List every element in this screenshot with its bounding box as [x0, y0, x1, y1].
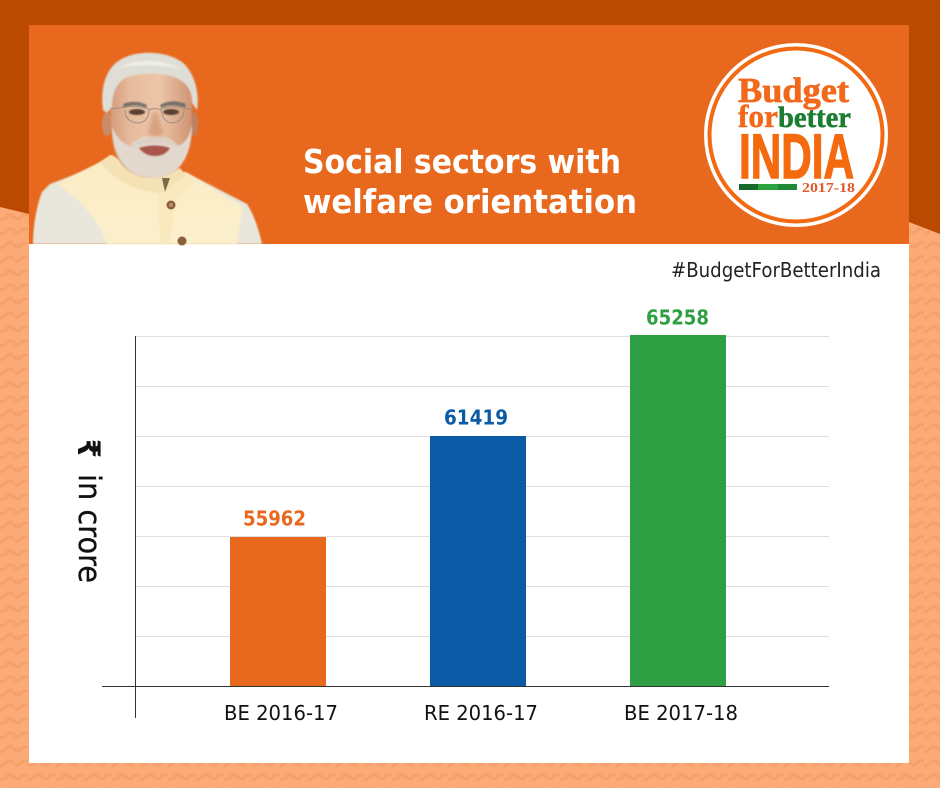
title [303, 142, 637, 221]
dark orange top band [0, 0, 940, 234]
title: welfare orientation [303, 182, 637, 221]
logo badge: Budget for better India: 2017-18 [802, 180, 855, 195]
value labels: 61419 [444, 406, 508, 430]
ears [102, 112, 112, 136]
logo badge: Budget for better India: for [738, 98, 778, 134]
value labels: 55962 [243, 506, 306, 530]
y-axis label: in crore [71, 474, 107, 583]
title: Social sectors with [303, 142, 621, 181]
category labels: RE 2016-17 [424, 701, 538, 725]
logo badge: Budget for better India [704, 43, 888, 227]
value labels: 65258 [646, 306, 709, 330]
logo badge: Budget for better India: better [778, 101, 851, 134]
logo badge: Budget for better India: INDIA [739, 122, 854, 192]
bar: RE 2016-17 [430, 436, 526, 686]
bar chart [102, 306, 829, 725]
y-axis label [70, 439, 107, 583]
panel: white chart area [29, 244, 909, 763]
value labels [243, 306, 709, 530]
bar: BE 2016-17 [230, 537, 326, 686]
logo badge: Budget for better India: Budget [738, 71, 849, 110]
category labels [224, 701, 738, 725]
portrait illustration [33, 53, 262, 245]
bar: BE 2017-18 [630, 335, 726, 686]
panel: orange header [29, 25, 909, 244]
hashtag: #BudgetForBetterIndia [671, 258, 881, 282]
y-axis label: ₹ [70, 439, 106, 458]
category labels: BE 2016-17 [224, 701, 338, 725]
category labels: BE 2017-18 [624, 701, 738, 725]
